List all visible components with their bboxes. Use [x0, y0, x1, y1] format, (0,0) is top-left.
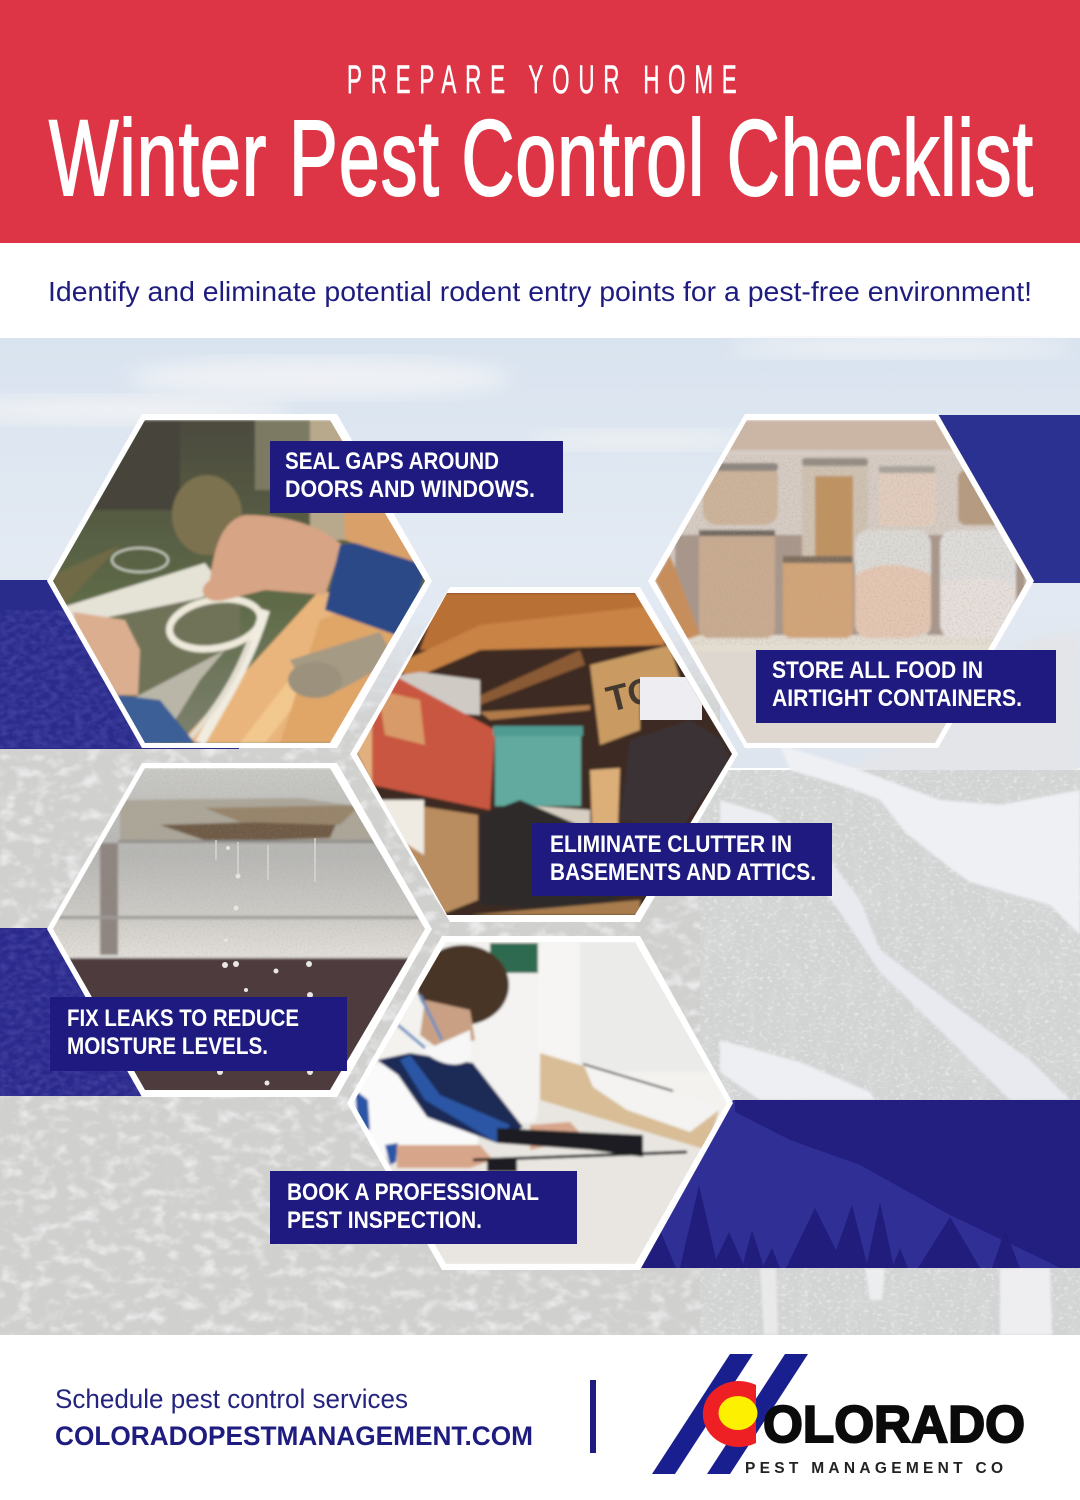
red header band: [0, 0, 1080, 243]
footer divider: [590, 1380, 596, 1453]
blue band left lower: [0, 928, 145, 1096]
footer call to action: Schedule pest control services: [55, 1384, 408, 1414]
label: store food: AIRTIGHT CONTAINERS.: [772, 685, 1022, 712]
label: seal gaps: DOORS AND WINDOWS.: [285, 476, 535, 503]
label: seal gaps: [270, 441, 563, 513]
title: Winter Pest Control Checklist: [49, 97, 1033, 218]
logo: Colorado Pest Management Co: [652, 1354, 1025, 1477]
label: fix leaks: FIX LEAKS TO REDUCE: [67, 1005, 299, 1032]
photo hexagon: pest inspection: [347, 936, 733, 1270]
label: eliminate clutter: [532, 823, 832, 896]
label: seal gaps: SEAL GAPS AROUND: [285, 448, 499, 475]
photo hexagon: leaking ceiling: [47, 763, 432, 1097]
label: eliminate clutter: ELIMINATE CLUTTER IN: [550, 831, 792, 858]
footer panel: [0, 1335, 1080, 1500]
intro sentence: Identify and eliminate potential rodent entry points for a pest-free environment!: [48, 276, 1032, 307]
photo hexagon: cluttered attic: TO: [602, 668, 660, 720]
blue band left upper: [0, 580, 239, 749]
label: book inspection: BOOK A PROFESSIONAL: [287, 1179, 539, 1206]
photo hexagon: sealing window gaps: [47, 414, 432, 748]
footer call to action: [55, 1384, 533, 1451]
label: store food: STORE ALL FOOD IN: [772, 657, 983, 684]
label: eliminate clutter: BASEMENTS AND ATTICS.: [550, 859, 816, 886]
logo: Colorado Pest Management Co: PEST MANAGEMENT CO: [745, 1460, 1003, 1477]
winter landscape background: [0, 338, 1080, 1335]
blue band right upper: [938, 415, 1080, 583]
label: book inspection: [270, 1171, 577, 1244]
eyebrow heading: PREPARE YOUR HOME: [347, 57, 737, 102]
footer call to action: COLORADOPESTMANAGEMENT.COM: [55, 1421, 533, 1451]
label: fix leaks: MOISTURE LEVELS.: [67, 1033, 268, 1060]
photo hexagon: pantry jars: [648, 414, 1034, 748]
logo: Colorado Pest Management Co: OLORADO: [763, 1396, 1025, 1454]
photo hexagon: cluttered attic: [350, 587, 740, 922]
label: store food: [756, 650, 1056, 723]
snow slopes: [720, 745, 1080, 1335]
blue band right lower: [638, 1100, 1080, 1268]
label: book inspection: PEST INSPECTION.: [287, 1207, 482, 1234]
label: fix leaks: [50, 997, 347, 1071]
